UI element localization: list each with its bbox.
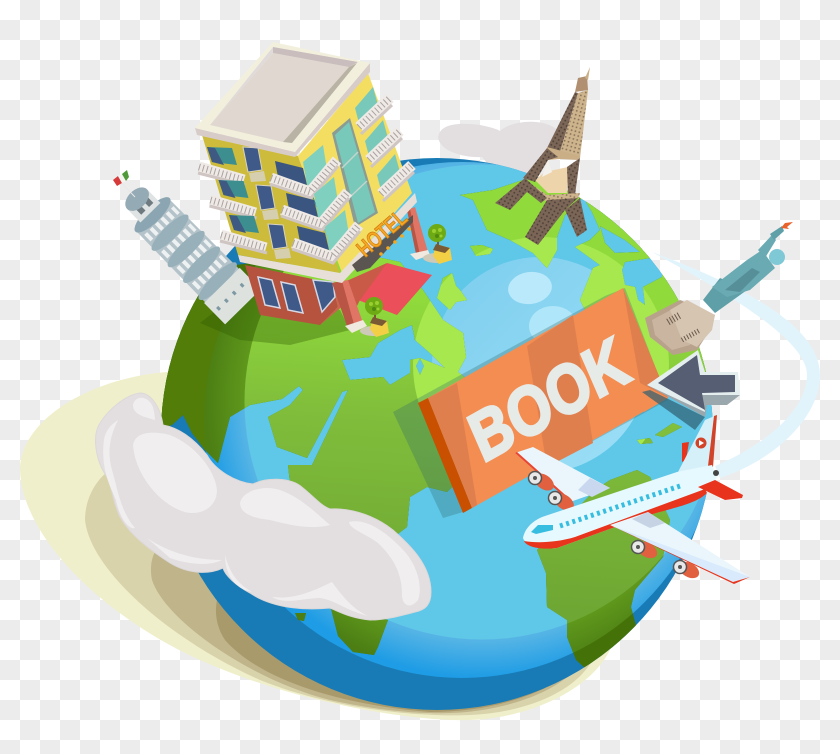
statue body	[703, 278, 747, 313]
pillars and ground floor	[245, 265, 338, 325]
hotel shadow on land	[200, 292, 350, 345]
globe highlights	[506, 269, 577, 346]
far wing	[515, 447, 610, 502]
floor band	[238, 193, 417, 283]
pedestal	[645, 300, 715, 355]
left wall	[202, 135, 340, 273]
potted plant	[423, 224, 452, 264]
near engines	[632, 538, 702, 582]
torch flame	[781, 222, 793, 229]
upper leg braces	[523, 148, 558, 182]
Eiffel tower	[495, 67, 590, 245]
first platform	[523, 178, 580, 202]
fuselage	[523, 465, 717, 548]
hotel sign: HOTEL	[351, 204, 412, 262]
book title: BOOK	[459, 323, 639, 477]
cloud highlights	[103, 398, 420, 616]
potted plant	[360, 297, 389, 337]
book	[418, 288, 668, 513]
balconies	[198, 87, 414, 263]
book shadow	[393, 288, 668, 518]
arrow cursor	[642, 350, 740, 430]
statue of Liberty	[645, 222, 793, 355]
flight path trail	[652, 252, 820, 478]
ocean	[150, 150, 730, 720]
cloud behind globe	[438, 122, 562, 185]
tower legs	[495, 178, 547, 210]
red carpet	[357, 263, 432, 315]
ground floor windows	[258, 277, 280, 308]
leaning tower of Pisa	[112, 174, 261, 325]
ground shadow	[20, 372, 610, 720]
hotel sign canopy	[352, 215, 413, 272]
globe	[150, 150, 730, 720]
entrance pillars	[332, 280, 363, 328]
tail fin	[682, 442, 689, 462]
cloud in front of globe	[96, 393, 431, 620]
far engines	[528, 470, 577, 514]
continents	[162, 180, 706, 668]
right wall	[298, 73, 412, 273]
near wing	[610, 512, 750, 582]
hotel sign	[351, 204, 412, 262]
hotel building	[195, 42, 432, 333]
Italian flag	[113, 170, 135, 197]
cockpit	[531, 525, 553, 534]
windows	[560, 486, 680, 526]
rear stabilizer	[698, 480, 743, 500]
roof	[195, 42, 370, 157]
tall glass window	[332, 118, 378, 227]
airplane	[515, 415, 750, 584]
